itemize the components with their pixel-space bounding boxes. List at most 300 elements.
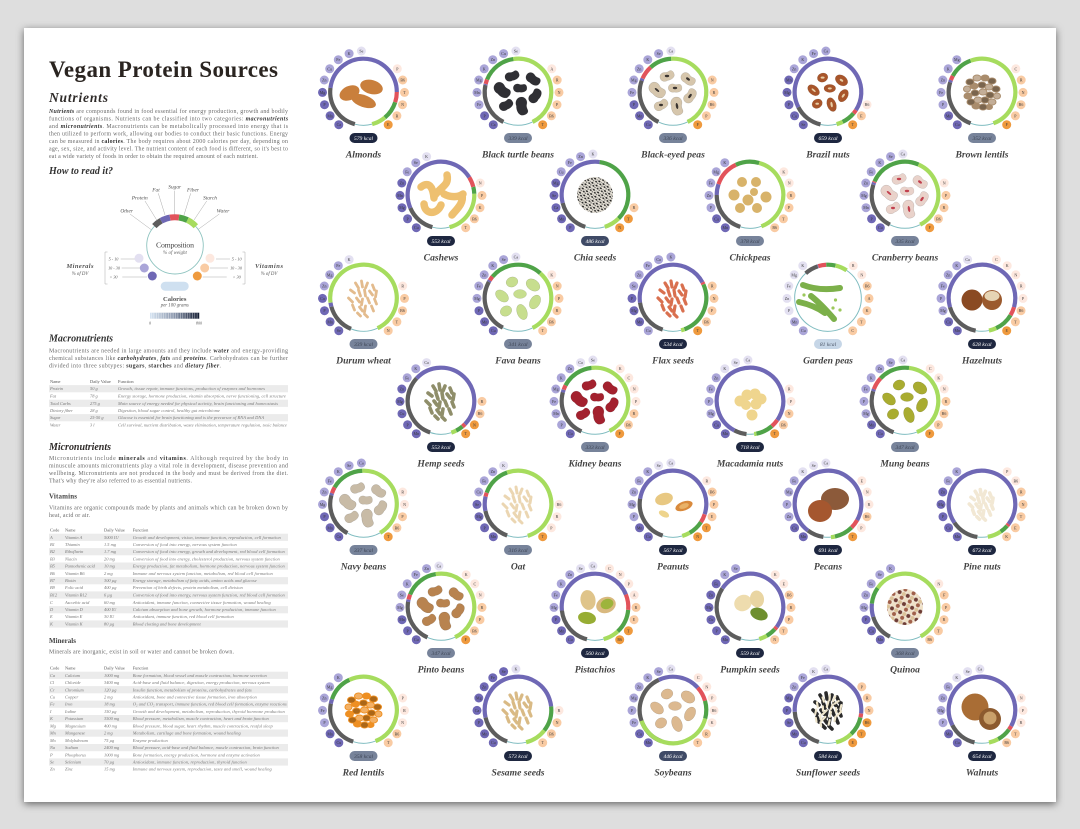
mineral dots: K	[878, 160, 881, 165]
mineral dots: Mn	[327, 525, 333, 530]
table: vitamins: Energy production, fat metabolism, hormone production, nervous system function	[132, 564, 285, 570]
icon: pecans	[808, 488, 849, 522]
name: Cashews	[424, 252, 459, 264]
food: Kidney beans	[550, 356, 640, 470]
mineral dots: Zn	[400, 386, 404, 392]
mineral dots: Mg	[631, 308, 637, 313]
vitamin dots: N	[696, 534, 699, 539]
table: minerals: 75 µg	[104, 738, 115, 743]
name: Quinoa	[890, 664, 920, 676]
mineral dots: P	[870, 216, 873, 221]
table: vitamins: Daily Value	[104, 528, 125, 532]
table: macronutrients: 25-50 g	[90, 415, 104, 420]
vitamin dots: R	[556, 78, 559, 82]
mineral dots: Ca	[554, 205, 558, 210]
table: macronutrients: Protein	[49, 386, 64, 391]
vitamin dots: A	[868, 296, 871, 301]
mineral dots: Mn	[792, 731, 797, 736]
vitamin dots: R	[558, 708, 561, 713]
table: minerals: Ca	[50, 673, 56, 678]
mineral dots: P	[483, 525, 486, 530]
calories scale: Calories	[163, 296, 187, 303]
vitamin dots: P	[945, 605, 948, 610]
vitamin dots: P	[788, 205, 791, 210]
mineral dots: P	[569, 225, 572, 230]
mineral dots: Fe	[792, 478, 796, 483]
table: macronutrients: Total Carbs	[50, 401, 71, 406]
calories pill: 691 kcal	[818, 548, 838, 554]
calories pill: 347 kcal	[430, 651, 451, 657]
vitamin dots: B6	[927, 637, 932, 642]
mineral dots: Ca	[669, 48, 673, 54]
mineral dots: K	[337, 469, 340, 474]
table: minerals: Immune and nervous system, reproduction, taste and smell, wound healing	[132, 767, 272, 773]
icon: almonds	[337, 77, 384, 111]
table: vitamins: 400 IU	[104, 607, 117, 612]
vitamin dots: B6	[1004, 740, 1009, 745]
text block: vitamins	[49, 506, 288, 519]
mineral dots: P	[786, 502, 789, 507]
vitamin dots: B6	[787, 592, 792, 598]
vitamin dots: T	[851, 122, 854, 127]
vitamin dots: N	[401, 102, 404, 107]
vitamin dots: N	[387, 328, 390, 333]
mineral dots: Se	[878, 572, 882, 577]
mineral dots: Fe	[477, 284, 481, 288]
table: minerals: Cr	[50, 687, 55, 692]
mineral dots: Mn	[482, 319, 487, 324]
vitamin dots: B6	[472, 628, 477, 633]
mineral dots: Ca	[591, 564, 595, 568]
food: Hemp seeds	[394, 354, 488, 470]
vitamin dots: B6	[865, 284, 870, 288]
mineral dots: Fe	[709, 180, 713, 186]
vitamin dots: F	[619, 431, 622, 436]
mineral dots: Zn	[941, 490, 945, 494]
mineral dots: Cu	[878, 431, 883, 436]
mineral dots	[704, 564, 740, 644]
vitamins scale: 5 - 10	[232, 256, 242, 262]
mineral dots: Cu	[568, 637, 573, 642]
text block: vitamins: Vitamins are organic compounds made by plants and animals which can be broken down by	[49, 506, 288, 512]
mineral dots: Mn	[491, 534, 496, 539]
mineral dots: Se	[359, 48, 364, 54]
vitamins scale: % of DV	[261, 272, 278, 277]
vitamin dots: N	[1014, 272, 1017, 277]
icon: hemp seeds	[426, 384, 454, 420]
mineral dots: Cu	[714, 422, 719, 427]
vitamin dots: K	[550, 272, 553, 277]
mineral dots: P	[406, 216, 409, 221]
mineral dots: Ca	[491, 122, 496, 127]
heading: micronutrients: Micronutrients	[48, 442, 111, 453]
table: minerals: 150 µg	[104, 709, 117, 714]
icon: macadamia nuts	[734, 388, 766, 420]
mineral dots: Zn	[864, 592, 868, 598]
mineral dots: Cu	[714, 216, 719, 221]
mineral dots: Cu	[646, 328, 651, 333]
mineral dots: Se	[812, 463, 816, 468]
calories pill: 333 kcal	[584, 445, 605, 451]
vitamin dots: B6	[1019, 308, 1023, 313]
vitamin dots: N	[473, 422, 476, 427]
mineral dots: Zn	[568, 572, 572, 577]
mineral dots: Mg	[553, 386, 559, 392]
mineral dots	[550, 150, 597, 232]
calories pill: 654 kcal	[972, 754, 992, 760]
mineral dots: Mg	[861, 605, 867, 610]
text block: macronutrients	[49, 348, 288, 370]
mineral dots: P	[478, 308, 481, 313]
vitamin dots: B6	[400, 308, 405, 313]
mineral dots: Ca	[578, 360, 583, 365]
vitamin dots: F	[1006, 122, 1009, 127]
mineral dots: Mn	[801, 534, 806, 539]
mineral dots: Mg	[631, 78, 637, 82]
table: minerals: Iodine	[64, 709, 76, 714]
mineral dots	[704, 356, 752, 438]
vitamin dots: N	[788, 180, 791, 186]
mineral dots: Mg	[713, 169, 719, 174]
mineral dots: Ca	[901, 358, 905, 362]
mineral dots: Ca	[824, 666, 828, 672]
table: minerals: Insulin function, metabolism of proteins, carbohydrates and fats	[132, 687, 252, 693]
table: macronutrients: 28 g	[90, 408, 98, 413]
mineral dots: Mg	[553, 180, 559, 186]
vitamin dots: C	[627, 375, 630, 380]
mineral dots	[550, 356, 597, 438]
mineral dots: Cu	[400, 411, 404, 416]
table: minerals: Blood pressure, metabolism, muscle contraction, heart and brain function	[133, 716, 269, 722]
table: macronutrients: Glucose is essential for brain functioning and is the precursor of RNA and DNA	[118, 415, 264, 420]
vitamin dots: B6	[712, 708, 716, 713]
composition labels: Water	[217, 208, 230, 214]
table: vitamins: 2 mg	[104, 571, 113, 576]
table: macronutrients: Daily Value	[90, 379, 111, 384]
mineral dots: P	[555, 617, 558, 622]
mineral dots: Mg	[784, 90, 790, 95]
table: vitamins: B5	[50, 564, 56, 568]
mineral dots	[472, 664, 520, 747]
composition labels	[120, 184, 230, 214]
mineral dots: Se	[502, 669, 506, 674]
food: Brown lentils	[936, 47, 1028, 160]
calories pill: 81 kcal	[820, 342, 837, 348]
mineral dots: P	[633, 514, 636, 519]
composition ring	[394, 354, 488, 448]
calories pill: 659 kcal	[818, 136, 838, 142]
name: Black turtle beans	[481, 150, 554, 160]
vitamin dots	[848, 100, 872, 129]
table: minerals: Copper	[65, 694, 78, 700]
name: Fava beans	[494, 356, 541, 366]
table: macronutrients: Growth, tissue repair, immune functions, production of enzymes and hormones	[118, 386, 265, 392]
mineral dots: Cu	[637, 731, 642, 736]
mineral dots: P	[942, 102, 945, 107]
food: Mung beans	[858, 354, 952, 470]
food: Sesame seeds	[471, 663, 565, 778]
vitamin dots: R	[556, 514, 559, 519]
name: Durum wheat	[335, 356, 391, 366]
vitamin dots: C	[995, 257, 998, 262]
food: Durum wheat	[318, 254, 409, 366]
mineral dots	[318, 255, 354, 335]
food: Flax seeds	[628, 252, 718, 366]
vitamin dots: T	[1020, 514, 1023, 519]
composition ring	[937, 47, 1027, 137]
vitamin dots: N	[773, 637, 776, 642]
icon: mung beans	[880, 378, 930, 424]
mineral dots: Mn	[553, 411, 559, 416]
vitamin dots: R	[481, 605, 484, 610]
name: Walnuts	[966, 768, 998, 778]
table: vitamins: Thiamin	[65, 542, 80, 547]
mineral dots: K	[425, 154, 428, 159]
table: macronutrients: 275 g	[90, 401, 101, 406]
mineral dots: P	[631, 296, 634, 301]
composition ring	[935, 457, 1029, 551]
composition labels: Starch	[203, 196, 217, 202]
composition ring	[319, 254, 408, 342]
vitamin dots: B6	[395, 525, 399, 530]
mineral dots: Se	[657, 669, 661, 674]
vitamin dots: N	[401, 720, 404, 725]
mineral dots: Fe	[320, 708, 325, 713]
vitamin dots: N	[1020, 696, 1023, 700]
table: vitamins: Folic acid	[64, 585, 84, 590]
mineral dots	[550, 562, 597, 644]
vitamin dots: T	[464, 431, 467, 436]
mineral dots: Cu	[955, 122, 960, 127]
vitamin dots	[384, 64, 409, 129]
mineral dots: Fe	[812, 51, 816, 56]
mineral dots: Mg	[954, 57, 960, 62]
vitamins scale	[193, 252, 283, 284]
mineral dots: Cu	[878, 225, 883, 230]
calories pill: 358 kcal	[353, 754, 373, 760]
calories pill: 579 kcal	[354, 136, 373, 142]
mineral dots: Mg	[474, 296, 480, 301]
table: vitamins: Calcium absorption and bone growth, hormone production, immune function	[133, 607, 276, 613]
vitamin dots	[1002, 64, 1028, 129]
composition ring	[628, 253, 718, 343]
composition leader lines	[130, 191, 219, 230]
mineral dots: K	[947, 66, 950, 71]
table: minerals: Blood pressure, blood sugar, heart rhythm, muscle contraction, restful sleep	[133, 723, 273, 729]
mineral dots: K	[646, 675, 649, 680]
mineral dots: Cu	[336, 534, 341, 539]
mineral dots: Fe	[869, 169, 873, 174]
mineral dots: Zn	[785, 296, 789, 301]
vitamin dots: N	[711, 78, 714, 82]
mineral dots: Mn	[786, 78, 792, 82]
mineral dots: K	[560, 581, 563, 586]
mineral dots: Se	[591, 358, 595, 362]
mineral dots: Zn	[637, 272, 641, 277]
table: macronutrients: 3 l	[90, 422, 95, 428]
mineral dots: Fe	[405, 375, 409, 380]
mineral dots	[704, 158, 730, 232]
vitamin dots: K	[479, 205, 482, 210]
mineral dots: Fe	[630, 90, 634, 95]
vitamin dots: P	[861, 684, 864, 689]
mineral dots: K	[870, 375, 873, 380]
table: vitamins: 6 µg	[104, 592, 113, 598]
icon: flax seeds	[658, 281, 686, 317]
mineral dots: Se	[347, 463, 351, 468]
food: Pistachios	[548, 560, 642, 676]
mineral dots: Fe	[554, 592, 558, 598]
vitamin dots: K	[1006, 263, 1009, 268]
vitamin dots: N	[403, 502, 406, 507]
vitamin dots: K	[1005, 534, 1008, 539]
mineral dots: Mg	[786, 490, 792, 494]
icon: pine nuts	[969, 490, 993, 520]
composition labels: Fat	[151, 188, 160, 194]
mineral dots: Se	[734, 566, 738, 571]
vitamin dots	[538, 706, 564, 747]
table: vitamins: 80 µg	[104, 622, 115, 626]
mineral dots: Fe	[482, 478, 486, 483]
vitamin dots: F	[697, 122, 700, 127]
mineral dots: Zn	[322, 490, 327, 494]
vitamin dots: R	[401, 284, 404, 288]
table: vitamins: 5000 IU	[104, 535, 119, 540]
vitamin dots: B6	[781, 422, 786, 427]
vitamin dots	[848, 476, 874, 541]
table: vitamins: K	[49, 622, 54, 626]
table: vitamins: B2	[50, 549, 56, 554]
mineral dots: Zn	[632, 490, 636, 494]
vitamin dots	[461, 397, 486, 438]
text block: macronutrients: chemical substances like carbohydrates, fats and proteins. Carbohydrates can be further	[49, 355, 288, 362]
mineral dots: Mg	[631, 696, 637, 700]
mineral dots: Cu	[709, 617, 713, 622]
vitamin dots: B6	[865, 720, 869, 725]
calories pill: 628 kcal	[972, 342, 992, 348]
vitamin dots: B6	[549, 731, 554, 736]
icon: hazelnuts	[962, 290, 1002, 310]
composition ring	[858, 354, 952, 448]
table: minerals: 1000 mg	[104, 673, 120, 678]
calories pill: 486 kcal	[585, 239, 605, 245]
mineral dots	[936, 255, 972, 335]
vitamin dots: N	[1022, 90, 1025, 95]
table: vitamins: C	[50, 600, 53, 605]
table: vitamins: D	[49, 607, 54, 612]
name: Pecans	[814, 562, 842, 572]
table: minerals: Chromium	[65, 687, 84, 692]
vitamin dots: P	[479, 617, 482, 622]
vitamin dots: N	[556, 284, 559, 288]
mineral dots: Cu	[491, 328, 496, 333]
vitamin dots: T	[860, 731, 863, 736]
mineral dots: Se	[337, 328, 341, 333]
name: Black-eyed peas	[640, 150, 705, 160]
table: minerals: Fe	[49, 702, 55, 707]
table: minerals: 15 mg	[104, 767, 116, 772]
mineral dots: Cu	[792, 525, 797, 530]
food: Pine nuts	[935, 457, 1029, 572]
mineral dots: Se	[400, 592, 404, 598]
mineral dots: Fe	[491, 675, 495, 680]
name: Macadamia nuts	[716, 458, 783, 470]
vitamin dots: R	[705, 731, 708, 736]
mineral dots: Ca	[669, 666, 673, 672]
table: vitamins: B1	[50, 542, 55, 547]
table: vitamins: Vitamin B6	[65, 571, 85, 576]
mineral dots: Zn	[946, 272, 950, 277]
composition ring	[935, 663, 1029, 757]
name: Garden peas	[803, 356, 853, 366]
vitamin dots: R	[852, 263, 855, 268]
vitamin dots	[461, 178, 486, 232]
vitamin dots	[384, 694, 409, 747]
vitamin dots	[693, 282, 718, 335]
table: minerals: Mo	[49, 738, 57, 743]
table: minerals: Acid-base and fluid balance, digestion, energy production, nervous system	[132, 680, 270, 686]
mineral dots	[628, 664, 675, 747]
vitamin dots: P	[713, 502, 716, 507]
name: Chia seeds	[574, 252, 616, 264]
mineral dots	[936, 467, 962, 541]
icon: fava beans	[493, 275, 543, 321]
vitamin dots: B6	[617, 637, 622, 642]
vitamin dots: R	[396, 113, 399, 118]
vitamin dots: B6	[704, 319, 709, 324]
mineral dots: Mn	[637, 113, 642, 118]
calories scale: 0	[149, 320, 151, 326]
name: Sunflower seeds	[796, 768, 860, 778]
mineral dots: Ca	[824, 460, 828, 466]
mineral dots: Mn	[474, 90, 480, 95]
mineral dots: K	[348, 257, 351, 262]
vitamin dots: T	[541, 328, 544, 333]
vitamin dots: P	[556, 102, 559, 107]
mineral dots: Se	[657, 51, 661, 56]
vitamin dots: P	[396, 66, 399, 71]
mineral dots: Fe	[336, 263, 341, 268]
calories pill: 559 kcal	[740, 651, 760, 657]
table: minerals: Magnesium	[64, 723, 86, 728]
heading: minerals: Minerals	[49, 637, 76, 645]
table: minerals: Mg	[49, 723, 57, 728]
composition ring	[319, 666, 408, 754]
icon: sesame seeds	[503, 693, 531, 729]
vitamin dots: B6	[549, 113, 554, 118]
composition ring	[626, 663, 720, 757]
table: macronutrients: Cell survival, nutrient distribution, waste elimination, temperature regulation, toxic balance	[118, 422, 287, 428]
mineral dots: Mn	[946, 113, 951, 118]
mineral dots: Mg	[476, 514, 482, 519]
table: macronutrients: Dietary fiber	[49, 408, 73, 413]
vitamin dots: B6	[772, 225, 777, 230]
table: macronutrients: Name	[50, 379, 61, 384]
mineral dots: Mg	[320, 90, 325, 95]
calories pill: 339 kcal	[353, 342, 373, 348]
vitamins scale: > 30	[233, 274, 242, 280]
vitamin dots: R	[401, 490, 404, 494]
table: vitamins: 1.7 mg	[104, 549, 117, 554]
vitamin dots	[605, 564, 640, 644]
vitamin dots: T	[782, 216, 785, 221]
calories pill: 553 kcal	[431, 445, 451, 451]
mineral dots: Fe	[328, 478, 332, 483]
vitamin dots: R	[790, 193, 793, 198]
mineral dots: Mg	[940, 308, 946, 313]
mineral dots: Mn	[723, 637, 728, 642]
food: Cranberry beans	[860, 150, 950, 264]
